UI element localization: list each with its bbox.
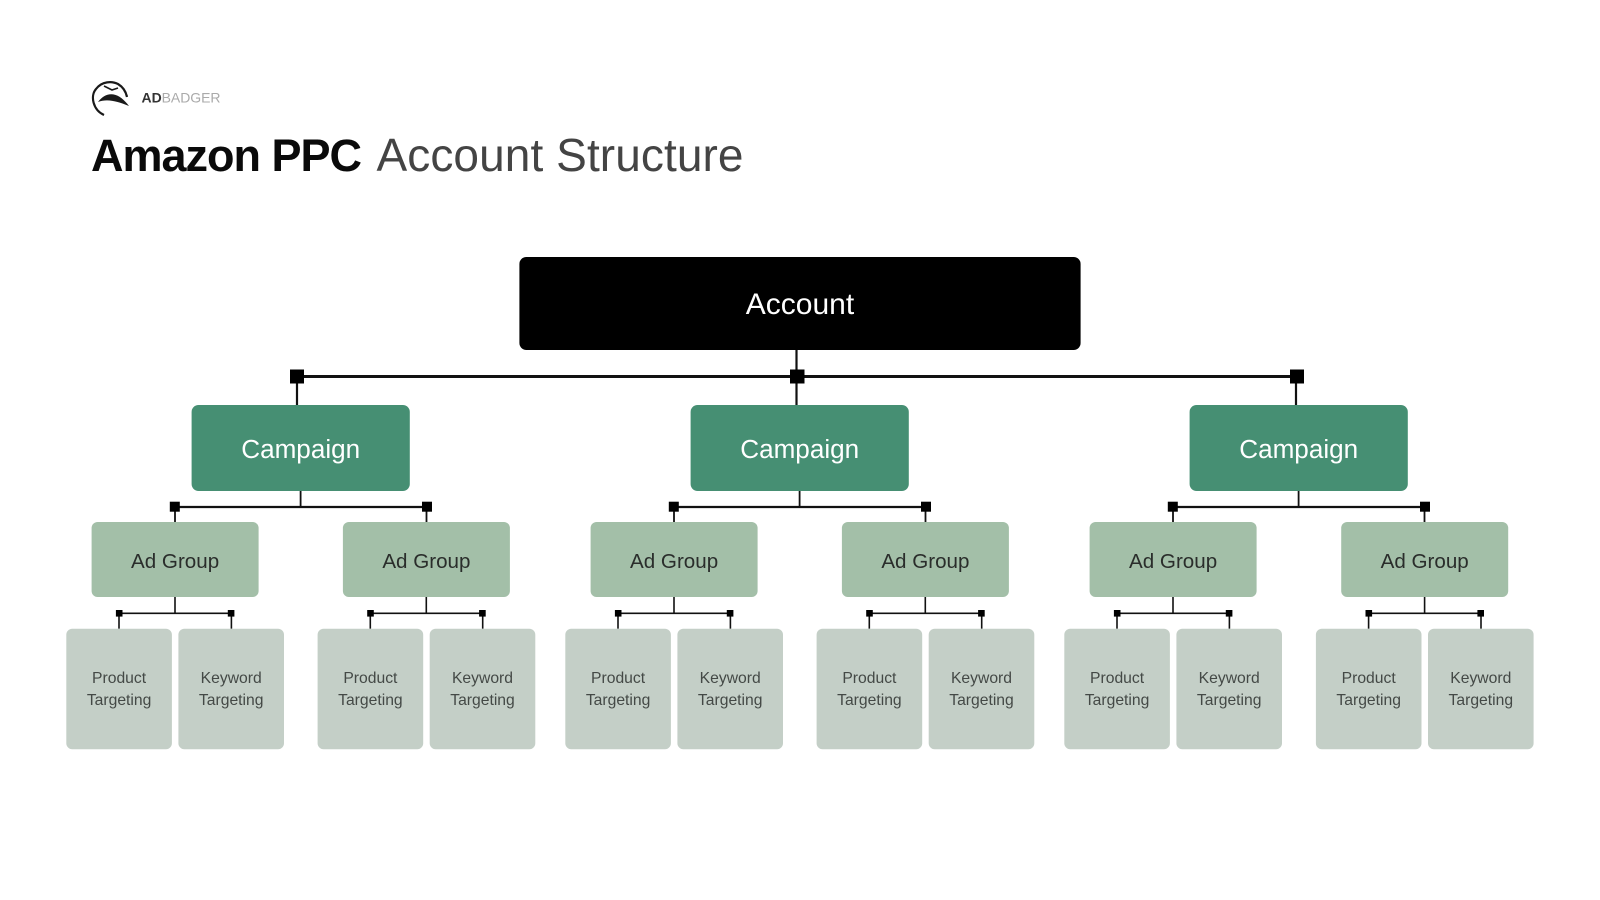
product targeting: Targeting: [586, 692, 650, 709]
ad group box: Ad Group: [630, 550, 718, 573]
product targeting: Product: [842, 670, 897, 687]
product targeting: [565, 629, 671, 749]
product targeting: Product: [92, 670, 147, 687]
ad group branch: [817, 522, 1034, 749]
title: Account Structure: [376, 129, 744, 181]
product targeting: Product: [591, 670, 646, 687]
campaign box: [192, 405, 410, 491]
connector: campaign to ad groups: [1168, 491, 1430, 522]
title: [91, 129, 744, 181]
product targeting: Targeting: [837, 692, 902, 709]
ad group box: Ad Group: [881, 550, 969, 573]
connector: campaign to ad groups: [170, 491, 432, 522]
account box: [519, 257, 1081, 350]
keyword targeting: [929, 629, 1034, 749]
logo: AdBadger: [93, 82, 220, 115]
product targeting: Product: [1090, 670, 1145, 687]
keyword targeting: [430, 629, 535, 749]
keyword targeting: Targeting: [949, 692, 1014, 709]
keyword targeting: Keyword: [700, 670, 761, 687]
connector: ad group to targeting: [1366, 597, 1484, 629]
title: Amazon PPC: [91, 130, 362, 181]
ad group branch: [1316, 522, 1534, 749]
connector: account to campaigns: [290, 350, 1304, 405]
keyword targeting: [677, 629, 783, 749]
campaign box: Campaign: [241, 434, 360, 464]
keyword targeting: [1176, 629, 1282, 749]
product targeting: Targeting: [87, 692, 151, 709]
ad group box: Ad Group: [1129, 550, 1217, 573]
product targeting: [817, 629, 922, 749]
campaign box: [1190, 405, 1408, 491]
keyword targeting: Targeting: [199, 692, 263, 709]
ad group box: Ad Group: [1381, 550, 1469, 573]
connector: ad group to targeting: [367, 597, 486, 629]
connector: ad group to targeting: [615, 597, 733, 629]
ad group box: [591, 522, 758, 597]
branch: campaign 1: [66, 405, 535, 749]
ad group branch: [1064, 522, 1282, 749]
keyword targeting: Keyword: [1450, 670, 1511, 687]
product targeting: Targeting: [338, 692, 403, 709]
keyword targeting: Targeting: [1449, 692, 1513, 709]
ad group box: [1341, 522, 1508, 597]
logo wordmark: ADBADGER: [142, 90, 220, 106]
ad group box: Ad Group: [382, 550, 470, 573]
keyword targeting: Targeting: [698, 692, 762, 709]
product targeting: Targeting: [1085, 692, 1149, 709]
connector: ad group to targeting: [1114, 597, 1232, 629]
keyword targeting: [178, 629, 284, 749]
ad group box: [1090, 522, 1257, 597]
keyword targeting: Keyword: [201, 670, 262, 687]
ad group branch: [565, 522, 783, 749]
ad group box: Ad Group: [131, 550, 219, 573]
account box: Account: [746, 288, 855, 321]
ad group box: [842, 522, 1009, 597]
product targeting: [66, 629, 172, 749]
ad group branch: [66, 522, 284, 749]
product targeting: [318, 629, 423, 749]
branch: campaign 2: [565, 405, 1034, 749]
product targeting: Product: [343, 670, 398, 687]
ad group branch: [318, 522, 535, 749]
branch: campaign 3: [1064, 405, 1534, 749]
product targeting: [1316, 629, 1422, 749]
ad group box: [343, 522, 510, 597]
campaign box: Campaign: [1239, 434, 1358, 464]
connector: ad group to targeting: [116, 597, 234, 629]
keyword targeting: Targeting: [1197, 692, 1261, 709]
product targeting: [1064, 629, 1170, 749]
keyword targeting: Keyword: [1199, 670, 1260, 687]
keyword targeting: [1428, 629, 1534, 749]
connector: campaign to ad groups: [669, 491, 931, 522]
keyword targeting: Keyword: [452, 670, 513, 687]
campaign box: [691, 405, 909, 491]
campaign box: Campaign: [740, 434, 859, 464]
connector: ad group to targeting: [866, 597, 985, 629]
product targeting: Product: [1342, 670, 1396, 687]
keyword targeting: Keyword: [951, 670, 1012, 687]
ad group box: [92, 522, 259, 597]
icon: badger: [93, 82, 129, 115]
keyword targeting: Targeting: [450, 692, 515, 709]
product targeting: Targeting: [1336, 692, 1401, 709]
